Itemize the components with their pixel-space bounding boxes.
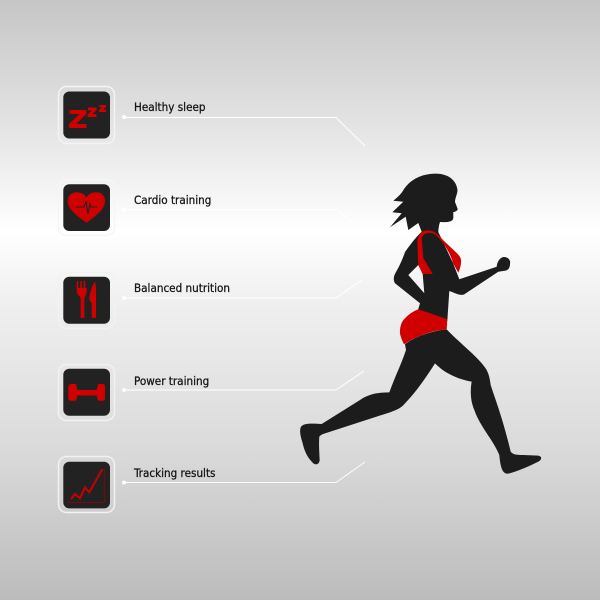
icon: dumbbell [58, 364, 114, 420]
red shorts [400, 309, 447, 344]
icon: heart [58, 180, 114, 236]
label: Balanced nutrition: Balanced nutrition [134, 281, 230, 295]
label: Cardio training: Cardio training [134, 193, 211, 207]
connector line [122, 371, 364, 392]
label: Tracking results: Tracking results [133, 466, 215, 480]
runner figure [300, 174, 541, 474]
legs silhouette [300, 329, 541, 474]
item: Tracking results [58, 456, 365, 512]
red top [417, 230, 461, 274]
icon: sleep [58, 86, 114, 144]
icon: fork and knife [58, 272, 114, 328]
item: Power training [58, 364, 364, 420]
item: Cardio training [58, 180, 365, 236]
item: Healthy sleep [58, 86, 365, 146]
item: Balanced nutrition [58, 272, 362, 328]
connector line [122, 208, 365, 232]
label: Healthy sleep: Healthy sleep [134, 100, 206, 114]
label: Power training: Power training [134, 374, 209, 388]
connector line [122, 280, 362, 300]
connector line [122, 115, 365, 146]
upper body silhouette [390, 174, 510, 321]
connector line [122, 462, 365, 484]
icon: chart [58, 456, 114, 512]
